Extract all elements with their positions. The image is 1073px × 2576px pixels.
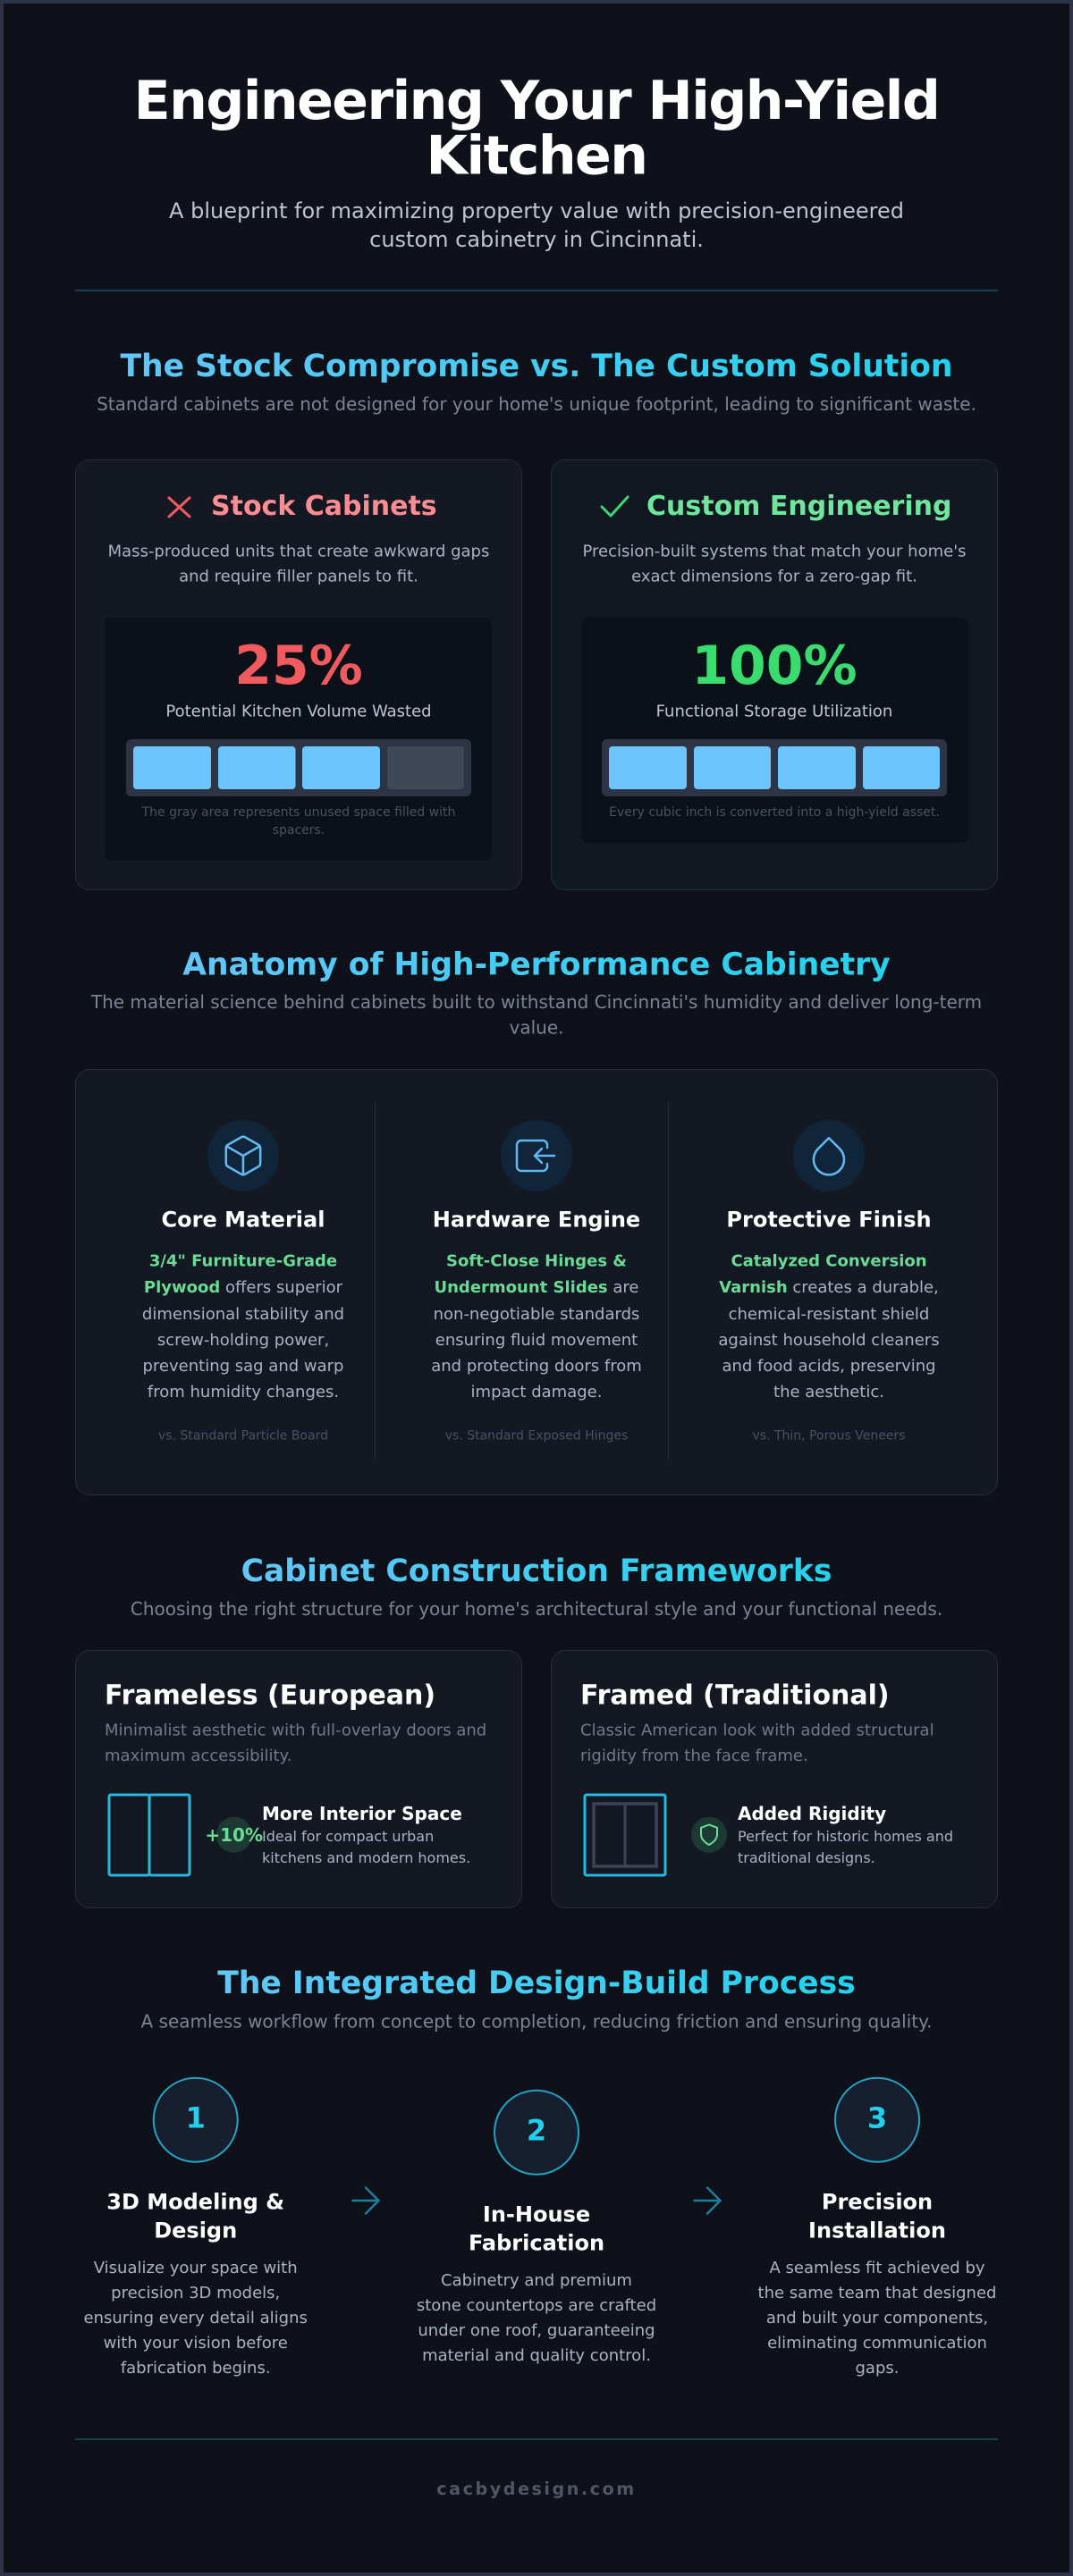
description: maximum accessibility. — [105, 1747, 291, 1765]
heading: Framed (Traditional) — [580, 1680, 890, 1711]
arrow: step 1 to 2 — [352, 2188, 379, 2213]
step heading — [106, 2190, 284, 2243]
benefit text: Ideal for compact urban — [262, 1828, 434, 1845]
subtitle: custom cabinetry in Cincinnati. — [369, 227, 704, 252]
badge: +10% — [205, 1817, 263, 1853]
description: Minimalist aesthetic with full-overlay doors and — [105, 1722, 486, 1739]
body: Undermount Slides are — [435, 1278, 638, 1297]
custom stat box — [581, 618, 968, 843]
panel: anatomy — [75, 1069, 998, 1494]
step description: ensuring every detail aligns — [84, 2309, 308, 2328]
step description — [417, 2271, 656, 2365]
number badge: 2 — [527, 2113, 546, 2147]
section heading: stock vs custom: Standard cabinets are not designed for your home's unique footprint, leading to significant waste. — [97, 393, 976, 415]
step heading: 3D Modeling & — [106, 2190, 284, 2215]
badge: shield — [691, 1817, 727, 1853]
section heading: process — [141, 1966, 932, 2033]
column: core material — [142, 1120, 344, 1443]
diagram: frameless cabinet — [109, 1795, 190, 1875]
step description: with your vision before — [104, 2334, 288, 2353]
section heading: stock vs custom — [97, 349, 976, 415]
step heading: In-House — [483, 2202, 590, 2227]
body: and protecting doors from — [431, 1357, 642, 1376]
benefit text: traditional designs. — [738, 1849, 875, 1866]
body: Varnish creates a durable, — [719, 1278, 939, 1297]
description — [580, 1722, 934, 1765]
section heading: anatomy: Anatomy of High-Performance Cabinetry — [182, 947, 891, 983]
panel: stock cabinets — [75, 459, 522, 890]
icon: x mark — [169, 498, 190, 517]
body: from humidity changes. — [148, 1383, 339, 1402]
step heading: Fabrication — [469, 2231, 604, 2256]
description — [105, 1722, 486, 1765]
step description: Visualize your space with — [94, 2259, 298, 2277]
body: chemical-resistant shield — [729, 1305, 929, 1324]
custom description: Precision-built systems that match your home's — [582, 542, 967, 561]
number badge — [835, 2078, 919, 2162]
benefit text — [262, 1803, 470, 1866]
benefit text — [738, 1803, 953, 1866]
description: rigidity from the face frame. — [580, 1747, 808, 1765]
title: Kitchen — [427, 125, 646, 188]
stat note: The gray area represents unused space filled with — [141, 805, 455, 820]
stat note: spacers. — [273, 823, 325, 838]
step 3 — [758, 2078, 996, 2378]
description: Classic American look with added structural — [580, 1722, 934, 1739]
comparison note: vs. Thin, Porous Veneers — [753, 1428, 905, 1443]
diagram: framed cabinet — [585, 1795, 665, 1875]
body: Soft-Close Hinges & — [446, 1251, 627, 1271]
body: preventing sag and warp — [143, 1357, 343, 1376]
section heading: anatomy: The material science behind cabinets built to withstand Cincinnati's humidity and deliver long-term — [90, 991, 982, 1013]
step heading — [808, 2190, 946, 2243]
space bar: 3 of 4 used — [126, 739, 471, 796]
number badge — [494, 2091, 579, 2175]
stat label: Potential Kitchen Volume Wasted — [165, 703, 432, 720]
stat note — [141, 805, 455, 838]
step description: eliminating communication — [767, 2334, 987, 2353]
body: ensuring fluid movement — [435, 1331, 638, 1350]
stock description: and require filler panels to fit. — [179, 567, 418, 586]
stat note: Every cubic inch is converted into a high-yield asset. — [609, 805, 940, 820]
body: against household cleaners — [718, 1331, 940, 1350]
body: and food acids, preserving — [722, 1357, 936, 1376]
column: protective finish — [718, 1120, 940, 1443]
stock heading: Stock Cabinets — [211, 491, 437, 522]
icon: door with arrow — [501, 1120, 572, 1191]
panel: frameless — [75, 1650, 522, 1907]
stock description: Mass-produced units that create awkward gaps — [108, 542, 489, 561]
stat label: Functional Storage Utilization — [656, 703, 892, 720]
body — [718, 1251, 940, 1402]
stock description — [108, 542, 489, 586]
body: the aesthetic. — [773, 1383, 884, 1402]
benefit text: More Interior Space — [262, 1803, 462, 1824]
step heading: Design — [154, 2218, 237, 2243]
step description — [84, 2259, 308, 2378]
body: impact damage. — [471, 1383, 602, 1402]
step description: gaps. — [856, 2359, 899, 2378]
benefit text: kitchens and modern homes. — [262, 1849, 470, 1866]
number badge — [154, 2078, 238, 2162]
step heading: Precision — [822, 2190, 933, 2215]
section heading: anatomy: value. — [510, 1017, 563, 1039]
body: 3/4" Furniture-Grade — [149, 1251, 337, 1271]
step description: the same team that designed — [758, 2284, 996, 2302]
custom description: exact dimensions for a zero-gap fit. — [631, 567, 917, 586]
section heading: process: The Integrated Design-Build Process — [217, 1966, 856, 2001]
step description: under one roof, guaranteeing — [418, 2321, 655, 2340]
stock stat box — [105, 618, 492, 861]
panel: custom engineering — [551, 459, 998, 890]
custom description — [582, 542, 967, 586]
section heading: process: A seamless workflow from concept to completion, reducing friction and ensuring quality. — [141, 2011, 932, 2033]
icon: droplet — [793, 1120, 865, 1191]
panel: framed — [551, 1650, 998, 1907]
benefit text: Perfect for historic homes and — [738, 1828, 953, 1845]
icon: check mark — [602, 497, 628, 516]
space bar: 4 of 4 used — [602, 739, 947, 796]
heading: Hardware Engine — [433, 1207, 640, 1232]
step description: A seamless fit achieved by — [769, 2259, 985, 2277]
title: Engineering Your High-Yield — [134, 70, 939, 132]
body — [142, 1251, 344, 1402]
custom heading: Custom Engineering — [646, 491, 951, 522]
heading: Core Material — [162, 1207, 325, 1232]
title — [134, 70, 939, 188]
arrow: step 2 to 3 — [694, 2188, 721, 2213]
subtitle: A blueprint for maximizing property value with precision-engineered — [169, 198, 904, 223]
stat: 100%: 100% — [691, 635, 858, 697]
body — [431, 1251, 642, 1402]
body: Plywood offers superior — [144, 1278, 343, 1297]
number badge: 1 — [186, 2100, 206, 2134]
section heading: stock vs custom: The Stock Compromise vs. The Custom Solution — [120, 349, 953, 384]
step description: stone countertops are crafted — [417, 2296, 656, 2315]
step description: material and quality control. — [422, 2346, 651, 2365]
column: hardware engine — [431, 1120, 642, 1443]
section heading: frameworks — [131, 1553, 942, 1620]
benefit text: Added Rigidity — [738, 1803, 886, 1824]
comparison note: vs. Standard Exposed Hinges — [445, 1428, 628, 1443]
section heading: anatomy — [90, 947, 982, 1039]
body: screw-holding power, — [157, 1331, 329, 1350]
step description — [758, 2259, 996, 2378]
step description: and built your components, — [766, 2309, 988, 2328]
body: dimensional stability and — [142, 1305, 344, 1324]
subtitle — [169, 198, 904, 252]
icon: box — [207, 1120, 279, 1191]
number badge: 3 — [867, 2100, 887, 2134]
step description: fabrication begins. — [121, 2359, 271, 2378]
step heading: Installation — [808, 2218, 946, 2243]
section heading: frameworks: Cabinet Construction Frameworks — [241, 1553, 832, 1589]
stat: 25%: 25% — [234, 635, 363, 697]
section heading: frameworks: Choosing the right structure for your home's architectural style and your functional needs. — [131, 1598, 942, 1620]
step 2 — [417, 2091, 656, 2365]
heading: Protective Finish — [726, 1207, 932, 1232]
step 1 — [84, 2078, 308, 2378]
footer: cacbydesign.com — [436, 2479, 637, 2499]
step description: precision 3D models, — [111, 2284, 280, 2302]
body: non-negotiable standards — [434, 1305, 639, 1324]
comparison note: vs. Standard Particle Board — [158, 1428, 328, 1443]
body: Catalyzed Conversion — [731, 1251, 927, 1271]
step heading — [469, 2202, 604, 2256]
heading: Frameless (European) — [105, 1680, 435, 1711]
step description: Cabinetry and premium — [441, 2271, 632, 2290]
badge: +10%: +10% — [205, 1824, 263, 1846]
